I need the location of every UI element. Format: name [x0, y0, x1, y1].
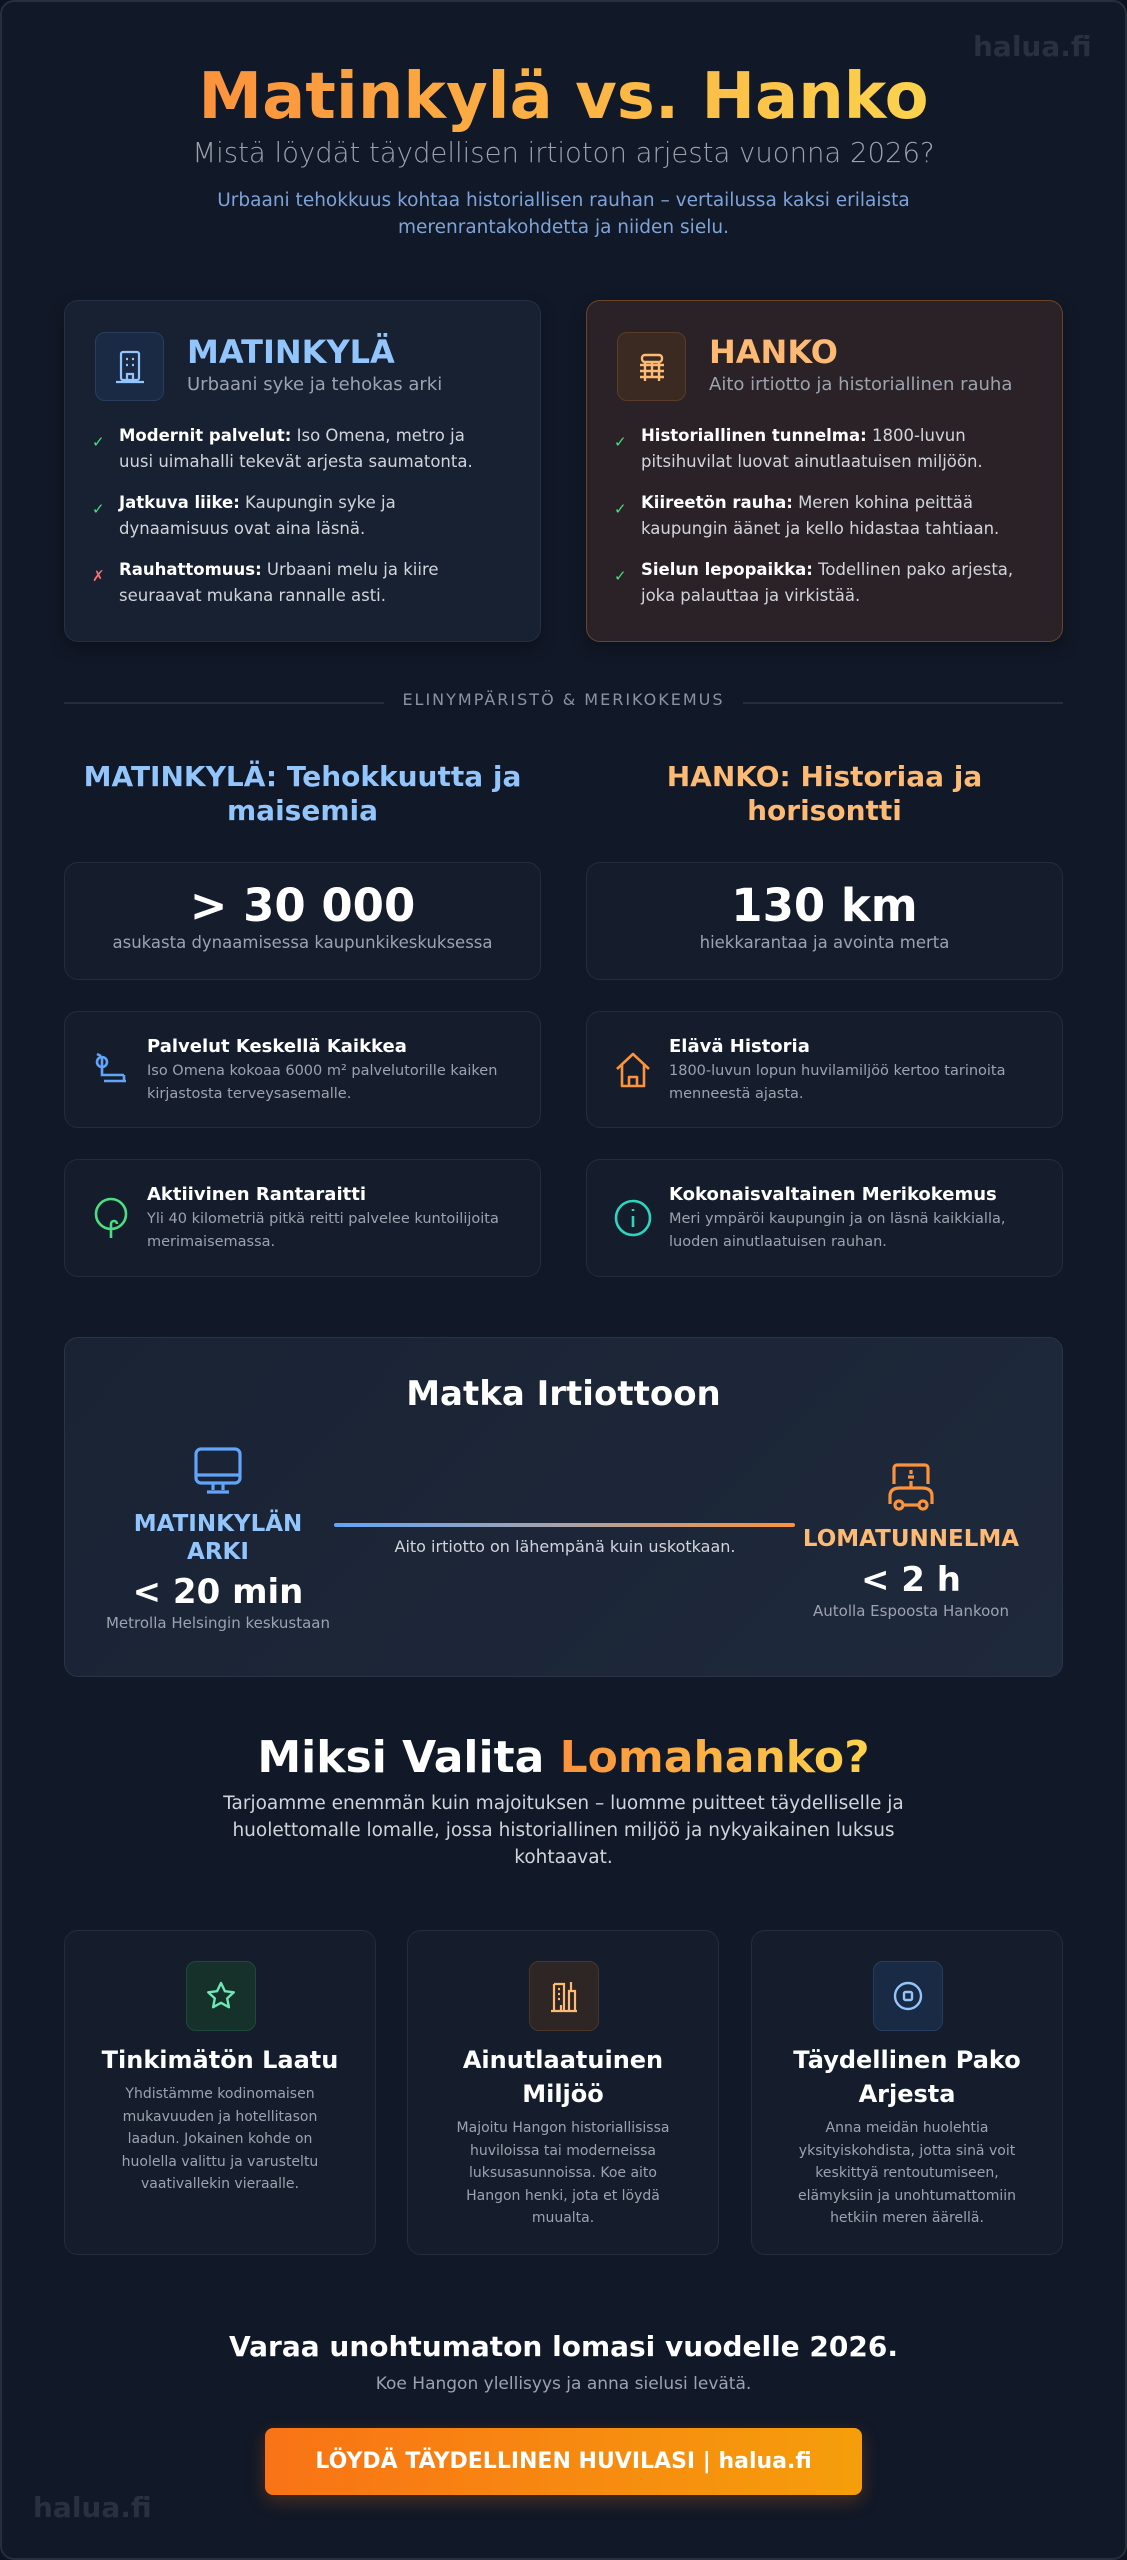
card: Pako: [751, 1930, 1063, 2255]
card: Laatu: [64, 1930, 376, 2255]
feature: Palvelut: Iso Omena kokoaa 6000 m² palvelutorille kaiken kirjastosta terveysasemalle.: [147, 1063, 497, 1102]
icon: building: [95, 332, 164, 401]
heading: Miksi Valita: Miksi Valita Lomahanko?: [257, 1732, 870, 1783]
panel: Hanko: Aito irtiotto ja historiallinen rauha: [709, 374, 1012, 395]
feature: Rantaraitti: [64, 1159, 541, 1277]
card: Miljöö: Ainutlaatuinen Miljöö: [463, 2046, 663, 2108]
icon: star: [186, 1961, 256, 2031]
heading: Matinkylä section: MATINKYLÄ: Tehokkuutta ja maisemia: [84, 760, 521, 827]
icon: tree: [94, 1198, 128, 1238]
watermark top: halua.fi: [973, 30, 1092, 63]
feature: Merikokemus: Kokonaisvaltainen Merikokemus: [669, 1184, 997, 1205]
stat: 30000: [64, 862, 541, 980]
left stop: < 20 min: [133, 1572, 303, 1612]
left stop: [106, 1447, 330, 1632]
feature: Palvelut: Palvelut Keskellä Kaikkea: [147, 1036, 407, 1057]
watermark bottom: halua.fi: [33, 2491, 152, 2524]
panel: Matinkylä: ✓: [92, 433, 105, 451]
panel: Matinkylä: Jatkuva liike: Kaupungin syke ja dynaamisuus ovat aina läsnä.: [119, 493, 396, 538]
three cards: [64, 1930, 1063, 2255]
right stop: [803, 1463, 1019, 1620]
icon: car: [888, 1463, 934, 1511]
list: Historiallinen tunnelma: 1800-luvun pitsihuvilat luovat ainutlaatuisen miljöön.: [641, 426, 983, 471]
panel: Hanko: ✓: [614, 567, 627, 585]
feature: Rantaraitti: Aktiivinen Rantaraitti: [147, 1184, 366, 1205]
card: Pako: Anna meidän huolehtia yksityiskohdista, jotta sinä voit keskittyä rentoutumiseen, elämyksiin ja unohtumattomiin hetkiin meren äärellä.: [798, 2120, 1016, 2226]
divider label: ELINYMPÄRISTÖ & MERIKOKEMUS: [402, 690, 725, 709]
icon: buildings: [529, 1961, 599, 2031]
card: Miljöö: [407, 1930, 719, 2255]
feature: Elävä historia: [586, 1011, 1063, 1128]
panel: Hanko: Sielun lepopaikka: Todellinen pako arjesta, joka palauttaa ja virkistää.: [641, 560, 1013, 605]
panel: Hanko: ✓: [614, 433, 627, 451]
icon: villa: [617, 332, 686, 401]
icon: circle: [873, 1961, 943, 2031]
arrow line: [334, 1523, 795, 1527]
left stop: MATINKYLÄN: [134, 1511, 302, 1537]
intro paragraph: Tarjoamme enemmän kuin majoituksen – luomme puitteet täydelliselle ja huolettomalle lomalle, jossa historiallinen miljöö ja nykyaikainen luksus kohtaavat.: [223, 1793, 904, 1868]
feature: Rantaraitti: Yli 40 kilometriä pitkä reitti palvelee kuntoilijoita merimaisemassa.: [147, 1211, 499, 1250]
stat: 30000: asukasta dynaamisessa kaupunkikeskuksessa: [112, 933, 493, 952]
CTA heading: Varaa unohtumaton lomasi vuodelle 2026.: [229, 2330, 898, 2363]
feature: Merikokemus: [586, 1159, 1063, 1277]
stat: 30000: > 30 000: [190, 879, 415, 932]
icon: monitor: [194, 1447, 242, 1494]
list: Modernit palvelut: Iso Omena, metro ja uusi uimahalli tekevät arjesta saumatonta.: [119, 426, 473, 471]
panel: Hanko: Kiireetön rauha: Meren kohina peittää kaupungin äänet ja kello hidastaa tahtiaan.: [641, 493, 999, 538]
CTA sub: Koe Hangon ylellisyys ja anna sielusi levätä.: [376, 2374, 751, 2394]
CTA button: [265, 2428, 862, 2495]
panel: Matinkylä: [64, 300, 541, 642]
feature: Elävä historia: 1800-luvun lopun huvilamiljöö kertoo tarinoita menneestä ajasta.: [669, 1063, 1006, 1102]
panel: Matinkylä: ✗: [92, 567, 105, 585]
panel: Matinkylä: ✓: [92, 500, 105, 518]
arrow caption: Aito irtiotto on lähempänä kuin uskotkaan.: [395, 1537, 735, 1556]
left stop: ARKI: [187, 1539, 249, 1565]
tagline: Urbaani tehokkuus kohtaa historiallisen rauhan – vertailussa kaksi erilaista merenrantakohdetta ja niiden sielu.: [217, 190, 910, 238]
panel: Matinkylä: Rauhattomuus: Urbaani melu ja kiire seuraavat mukana rannalle asti.: [119, 560, 439, 605]
icon: services: [96, 1052, 126, 1082]
heading: Hanko section: HANKO: Historiaa ja horisontti: [667, 760, 982, 827]
right stop: Autolla Espoosta Hankoon: [813, 1602, 1009, 1620]
subtitle: Mistä löydät täydellisen irtioton arjesta vuonna 2026?: [192, 137, 935, 169]
stat: 130 km: hiekkarantaa ja avointa merta: [700, 933, 949, 952]
left stop: Metrolla Helsingin keskustaan: [106, 1614, 330, 1632]
panel: Hanko: ✓: [614, 500, 627, 518]
card: Pako: Täydellinen Pako Arjesta: [793, 2046, 1021, 2108]
feature: Merikokemus: Meri ympäröi kaupungin ja on läsnä kaikkialla, luoden ainutlaatuisen rauhan.: [669, 1211, 1005, 1250]
card: Laatu: Tinkimätön Laatu: [102, 2046, 338, 2074]
feature: Elävä historia: Elävä Historia: [669, 1036, 810, 1057]
panel: journey: [64, 1337, 1063, 1677]
panel: Matinkylä: Urbaani syke ja tehokas arki: [187, 374, 442, 395]
card: Laatu: Yhdistämme kodinomaisen mukavuuden ja hotellitason laadun. Jokainen kohde on huolella valittu ja varusteltu vaativallekin vieraalle.: [122, 2086, 318, 2192]
card: Miljöö: Majoitu Hangon historiallisissa huviloissa tai moderneissa luksusasunnoissa. Koe aito Hangon henki, jota et löydä muualta.: [457, 2120, 669, 2226]
icon: info: [614, 1200, 652, 1236]
CTA button: LÖYDÄ TÄYDELLINEN HUVILASI | halua.fi: [315, 2449, 812, 2474]
panel: Hanko: [586, 300, 1063, 642]
feature: Palvelut: [64, 1011, 541, 1128]
journey title: Matka Irtiottoon: [406, 1374, 721, 1414]
right stop: LOMATUNNELMA: [803, 1526, 1019, 1552]
stat: 130 km: [586, 862, 1063, 980]
stat: 130 km: 130 km: [731, 879, 918, 932]
heading: HANKO: [709, 333, 838, 371]
title: Matinkylä vs. Hanko: [198, 60, 929, 134]
right stop: < 2 h: [861, 1560, 961, 1600]
icon: house: [616, 1052, 650, 1088]
heading: MATINKYLÄ: [187, 333, 395, 371]
